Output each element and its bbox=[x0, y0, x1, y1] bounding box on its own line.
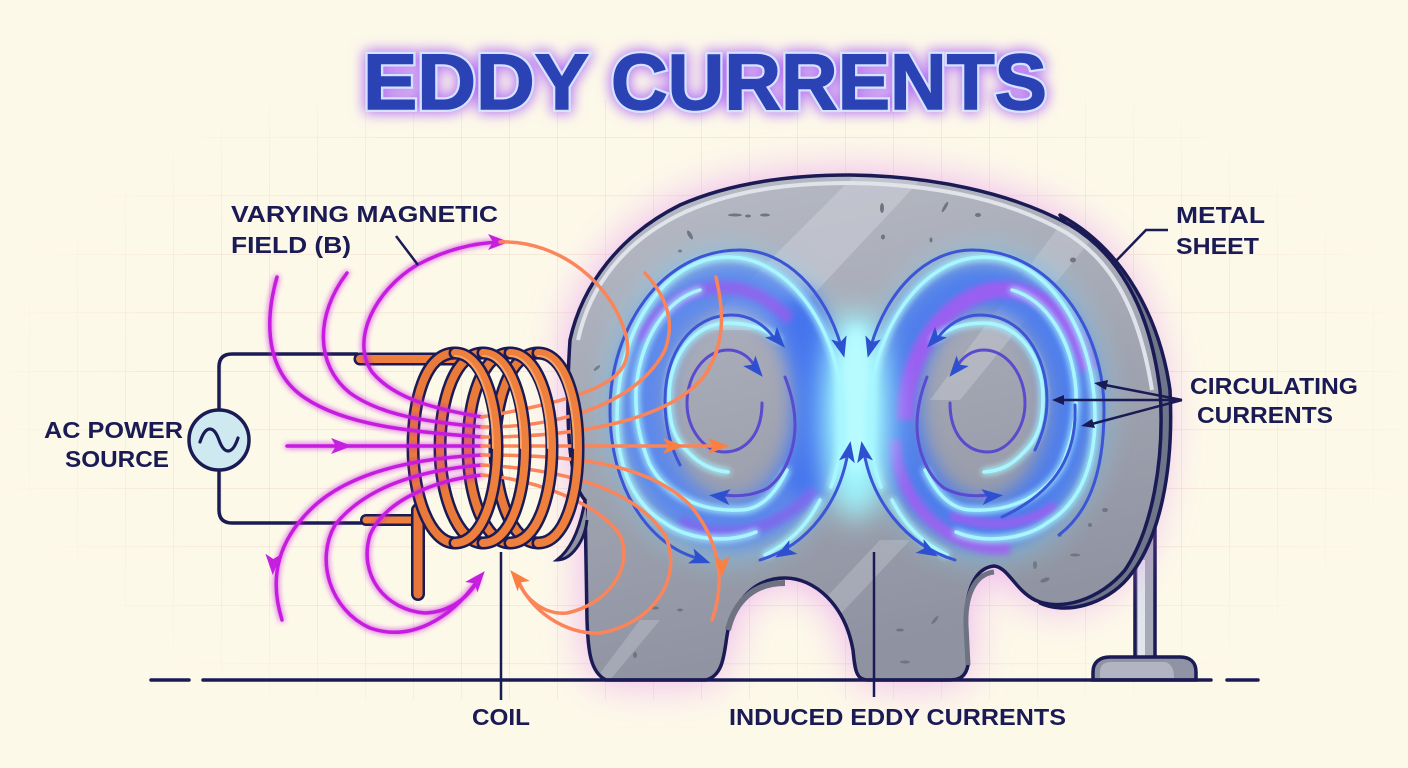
title: EDDY bbox=[363, 37, 589, 126]
label: induced eddy currents: INDUCED EDDY CURRENTS bbox=[729, 704, 1066, 730]
metal sheet bbox=[557, 170, 1171, 700]
metal sheet stand bbox=[1093, 480, 1196, 680]
label: AC power source: SOURCE bbox=[65, 446, 169, 472]
title: EDDY bbox=[363, 37, 589, 126]
label: varying magnetic field: VARYING MAGNETIC bbox=[231, 201, 498, 227]
label: AC power source: AC POWER bbox=[44, 417, 183, 443]
icon: AC power source bbox=[189, 410, 249, 470]
ground line bbox=[151, 678, 1258, 682]
magnetic field lines, exiting side bbox=[482, 242, 721, 633]
central bright glow bbox=[822, 310, 890, 520]
label: metal sheet: SHEET bbox=[1176, 233, 1259, 259]
label: circulating currents: CURRENTS bbox=[1197, 402, 1333, 428]
magnetic field lines, entering side bbox=[270, 242, 500, 632]
coil front half bbox=[455, 353, 578, 543]
label: varying magnetic field bbox=[231, 201, 498, 265]
label: AC power source bbox=[44, 417, 183, 472]
title: EDDY bbox=[363, 37, 589, 126]
label: circulating currents bbox=[1052, 373, 1358, 428]
label: coil: COIL bbox=[472, 704, 530, 730]
field arrowheads, magenta bbox=[265, 234, 509, 592]
label: varying magnetic field: FIELD (B) bbox=[231, 232, 351, 258]
left eddy swirl bbox=[616, 260, 840, 550]
label: metal sheet: METAL bbox=[1176, 202, 1265, 228]
neon current arcs, left bbox=[610, 250, 858, 571]
title: CURRENTS bbox=[611, 37, 1047, 126]
right eddy swirl bbox=[872, 260, 1096, 550]
title bbox=[363, 37, 1047, 126]
neon current arcs, right bbox=[854, 250, 1104, 563]
AC circuit wires bbox=[219, 354, 365, 523]
title: CURRENTS bbox=[611, 37, 1047, 126]
label: metal sheet bbox=[1115, 202, 1265, 262]
field arrowheads, orange bbox=[504, 438, 730, 591]
title: CURRENTS bbox=[611, 37, 1047, 126]
coil back half and leads bbox=[360, 353, 538, 594]
label: circulating currents: CIRCULATING bbox=[1190, 373, 1358, 399]
